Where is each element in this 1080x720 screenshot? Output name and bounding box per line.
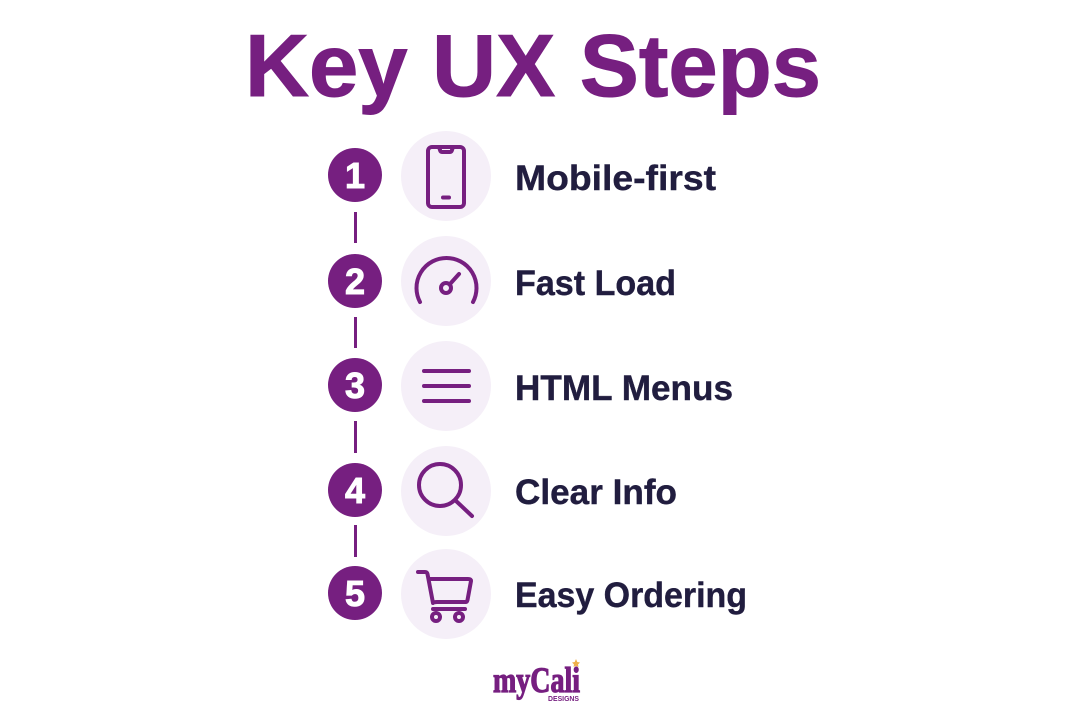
number badge 5: 5 bbox=[345, 573, 365, 614]
connector line 3-4 bbox=[354, 421, 357, 453]
step 5: Easy Ordering bbox=[328, 549, 747, 639]
step 1: Mobile-first bbox=[328, 131, 716, 221]
label: Clear Info: Clear Info bbox=[515, 473, 677, 512]
number badge 3: 3 bbox=[345, 365, 365, 406]
number badge 2: 2 bbox=[345, 261, 365, 302]
label: Mobile-first: Mobile-first bbox=[515, 159, 716, 198]
number badge 5 bbox=[328, 566, 382, 620]
label: Fast Load: Fast Load bbox=[515, 264, 676, 303]
connector line 1-2 bbox=[354, 212, 357, 243]
icon: speedometer bbox=[401, 236, 491, 326]
icon: shopping cart bbox=[401, 549, 491, 639]
title: Key UX Steps bbox=[245, 16, 821, 115]
label: HTML Menus: HTML Menus bbox=[515, 369, 733, 408]
connector line 4-5 bbox=[354, 525, 357, 557]
number badge 1 bbox=[328, 148, 382, 202]
step 2: Fast Load bbox=[328, 236, 676, 326]
number badge 3 bbox=[328, 358, 382, 412]
number badge 1: 1 bbox=[345, 155, 365, 196]
number badge 4: 4 bbox=[345, 470, 365, 511]
logo: myCali Designs: DESIGNS bbox=[548, 696, 579, 703]
number badge 4 bbox=[328, 463, 382, 517]
number badge 2 bbox=[328, 254, 382, 308]
label: Easy Ordering: Easy Ordering bbox=[515, 576, 747, 615]
connector line 2-3 bbox=[354, 317, 357, 348]
step 4: Clear Info bbox=[328, 446, 677, 536]
icon: smartphone bbox=[401, 131, 491, 221]
icon: menu bbox=[401, 341, 491, 431]
step 3: HTML Menus bbox=[328, 341, 733, 431]
icon: magnifier bbox=[401, 446, 491, 536]
logo: myCali Designs: myCali bbox=[493, 660, 580, 700]
